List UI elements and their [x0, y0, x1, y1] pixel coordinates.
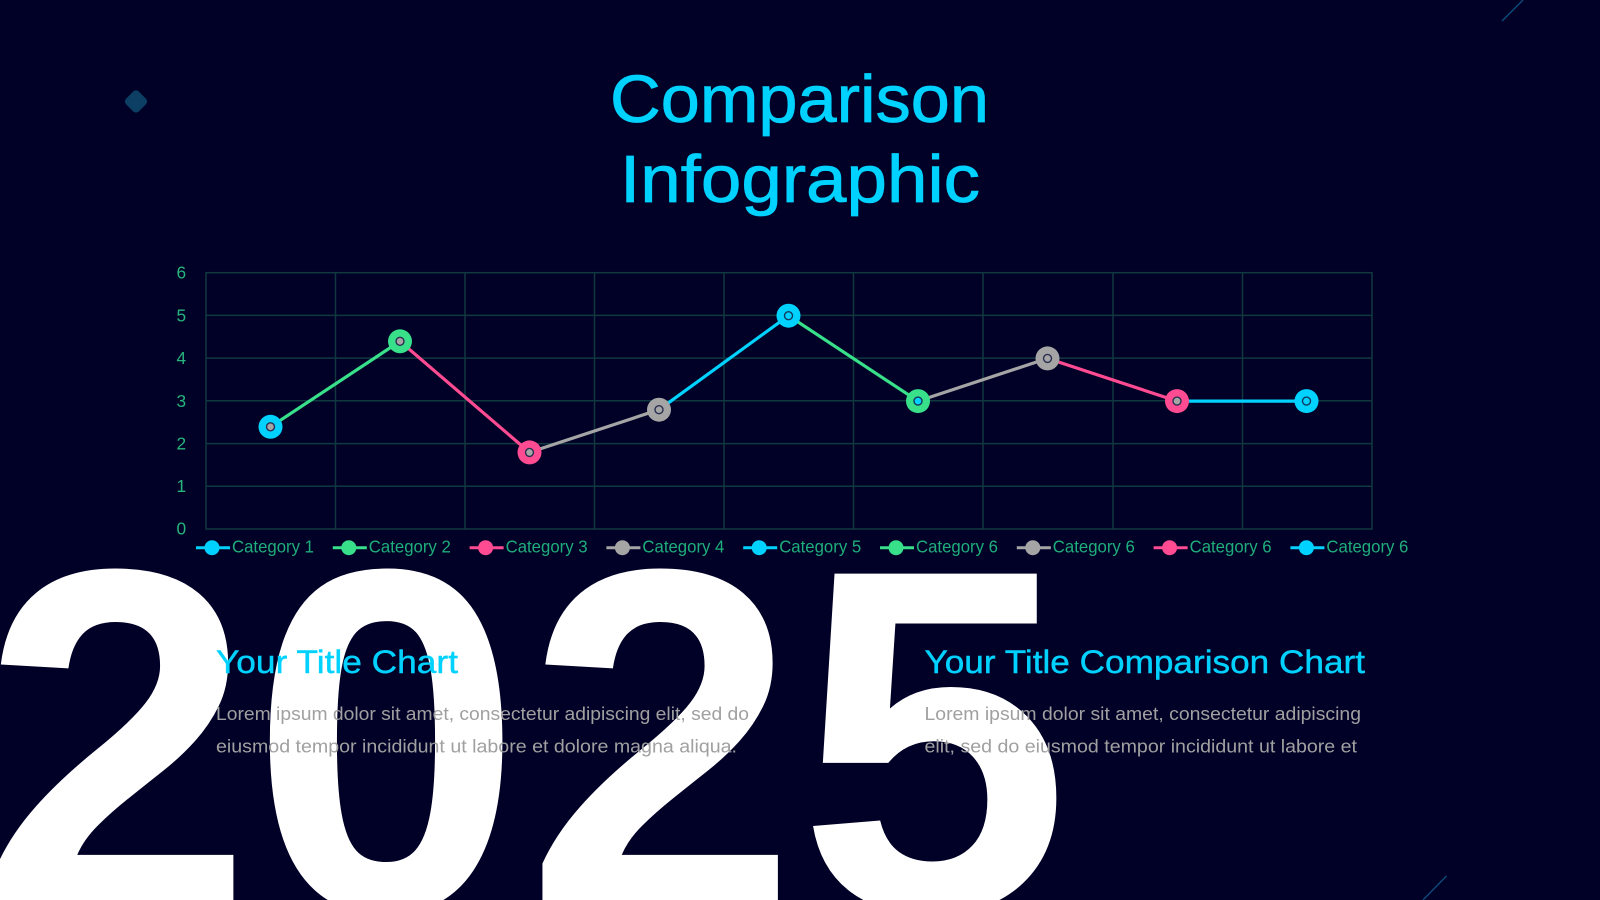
chart grid	[206, 273, 1372, 529]
data line segments	[270, 316, 1306, 452]
legend: category 3	[470, 537, 588, 557]
legend: category 6 pink: Category 6	[1190, 537, 1272, 557]
y axis labels: 3	[176, 391, 186, 411]
legend: category 3: Category 3	[506, 537, 588, 557]
legend: category 6 pink	[1154, 537, 1272, 557]
legend: category 6 cyan	[1290, 537, 1408, 557]
right body text: elit, sed do eiusmod tempor incididunt ut labore et	[924, 736, 1358, 757]
right body text: Lorem ipsum dolor sit amet, consectetur adipiscing	[924, 703, 1361, 724]
left body text	[216, 703, 749, 757]
left body text: Lorem ipsum dolor sit amet, consectetur adipiscing elit, sed do	[216, 703, 749, 724]
title: Comparison	[610, 62, 989, 137]
legend: category 4	[606, 537, 725, 557]
decorative diamond	[123, 89, 149, 114]
y axis labels: 4	[176, 348, 186, 368]
legend: category 6 green	[880, 537, 998, 557]
left text block	[216, 644, 749, 757]
right body text	[924, 703, 1361, 757]
legend: category 1: Category 1	[232, 537, 314, 557]
legend: category 1	[196, 537, 314, 557]
right text block	[924, 644, 1365, 757]
line chart	[176, 262, 1408, 557]
accent line: top right	[1502, 0, 1523, 21]
legend: category 4: Category 4	[642, 537, 725, 557]
legend: category 5	[743, 537, 861, 557]
y axis labels: 0	[176, 518, 186, 538]
legend: category 2: Category 2	[369, 537, 451, 557]
y axis labels: 6	[176, 262, 186, 282]
y axis labels	[176, 262, 186, 538]
legend: category 5: Category 5	[779, 537, 861, 557]
data markers	[258, 304, 1318, 464]
right heading: Your Title Comparison Chart	[924, 644, 1365, 680]
legend: category 6 green: Category 6	[916, 537, 998, 557]
y axis labels: 1	[176, 476, 186, 496]
chart legend	[196, 537, 1408, 557]
legend: category 2	[333, 537, 451, 557]
left body text: eiusmod tempor incididunt ut labore et dolore magna aliqua.	[216, 736, 737, 757]
y axis labels: 2	[176, 434, 186, 454]
legend: category 6 grey: Category 6	[1053, 537, 1135, 557]
y axis labels: 5	[176, 306, 186, 326]
legend: category 6 grey	[1017, 537, 1135, 557]
accent line: bottom right	[1423, 876, 1446, 900]
title	[610, 62, 989, 217]
legend: category 6 cyan: Category 6	[1326, 537, 1408, 557]
title: Infographic	[620, 142, 980, 217]
left heading: Your Title Chart	[216, 644, 458, 680]
